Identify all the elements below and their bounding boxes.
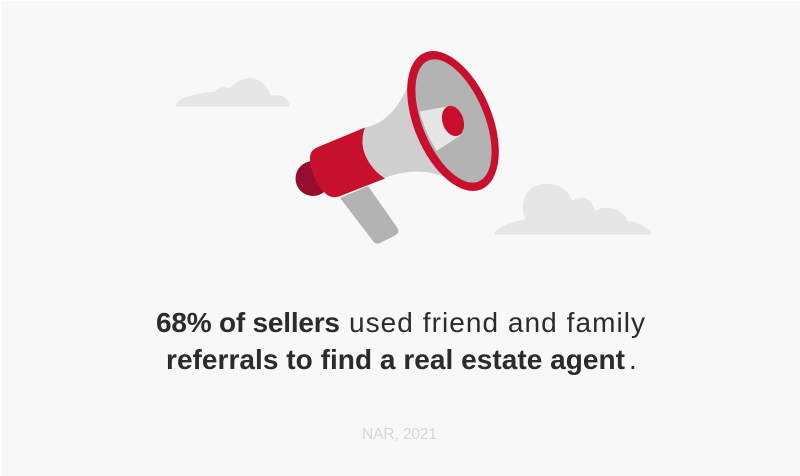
headline line 2: referrals to find a real estate agent [166, 344, 625, 375]
headline line 1: 68% of sellers [156, 307, 340, 338]
megaphone handle [340, 186, 398, 244]
headline line 1 [156, 307, 645, 338]
megaphone end cap [296, 161, 330, 196]
megaphone red rim [389, 38, 517, 204]
megaphone inner bell [400, 49, 507, 193]
megaphone grey horn [360, 86, 445, 178]
megaphone light beam [419, 106, 460, 151]
headline text [156, 307, 645, 375]
megaphone red grip [310, 128, 385, 197]
headline line 2: . [629, 344, 637, 375]
source note: NAR, 2021 [362, 426, 437, 443]
icon: megaphone [296, 38, 517, 244]
headline line 1: used friend and family [349, 307, 645, 338]
icon: left cloud [176, 78, 290, 106]
icon: right cloud [494, 184, 652, 234]
megaphone centre dot [438, 103, 468, 139]
